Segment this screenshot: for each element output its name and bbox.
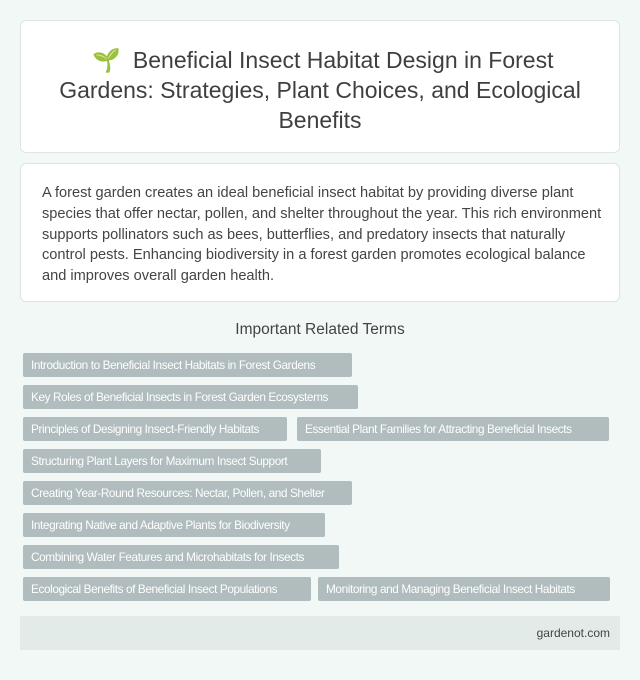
- tag list: [23, 353, 610, 601]
- title: Beneficial Insect Habitat Design in Forest Gardens: Strategies, Plant Choices, and Ecological Benefits: [59, 47, 581, 133]
- footer: [20, 616, 620, 650]
- description text: supports pollinators such as bees, butterflies, and predatory insects that naturally: [42, 227, 565, 243]
- icon: seedling: 🌱: [92, 47, 121, 73]
- description card: [20, 163, 620, 302]
- tag list: Creating Year-Round Resources: Nectar, Pollen, and Shelter: [31, 486, 325, 500]
- tag list: Introduction to Beneficial Insect Habitats in Forest Gardens: [31, 358, 315, 372]
- tag list: Combining Water Features and Microhabitats for Insects: [31, 550, 304, 564]
- footer credit: gardenot.com: [537, 626, 610, 640]
- tag list: Key Roles of Beneficial Insects in Forest Garden Ecosystems: [31, 390, 328, 404]
- header card: [20, 20, 620, 153]
- tag list: Structuring Plant Layers for Maximum Insect Support: [31, 454, 287, 468]
- tag list: Monitoring and Managing Beneficial Insect Habitats: [326, 582, 575, 596]
- description text: [42, 185, 602, 284]
- description text: control pests. Enhancing biodiversity in a forest garden promotes ecological balance: [42, 247, 586, 263]
- description text: and improves overall garden health.: [42, 268, 274, 284]
- section heading: Important Related Terms: [235, 321, 405, 338]
- tag list: Ecological Benefits of Beneficial Insect Populations: [31, 582, 277, 596]
- tag list: Principles of Designing Insect-Friendly Habitats: [31, 422, 259, 436]
- tag list: Essential Plant Families for Attracting Beneficial Insects: [305, 422, 572, 436]
- description text: species that offer nectar, pollen, and shelter throughout the year. This rich environment: [42, 206, 601, 222]
- tag list: Integrating Native and Adaptive Plants for Biodiversity: [31, 518, 290, 532]
- description text: A forest garden creates an ideal beneficial insect habitat by providing diverse plant: [42, 185, 573, 201]
